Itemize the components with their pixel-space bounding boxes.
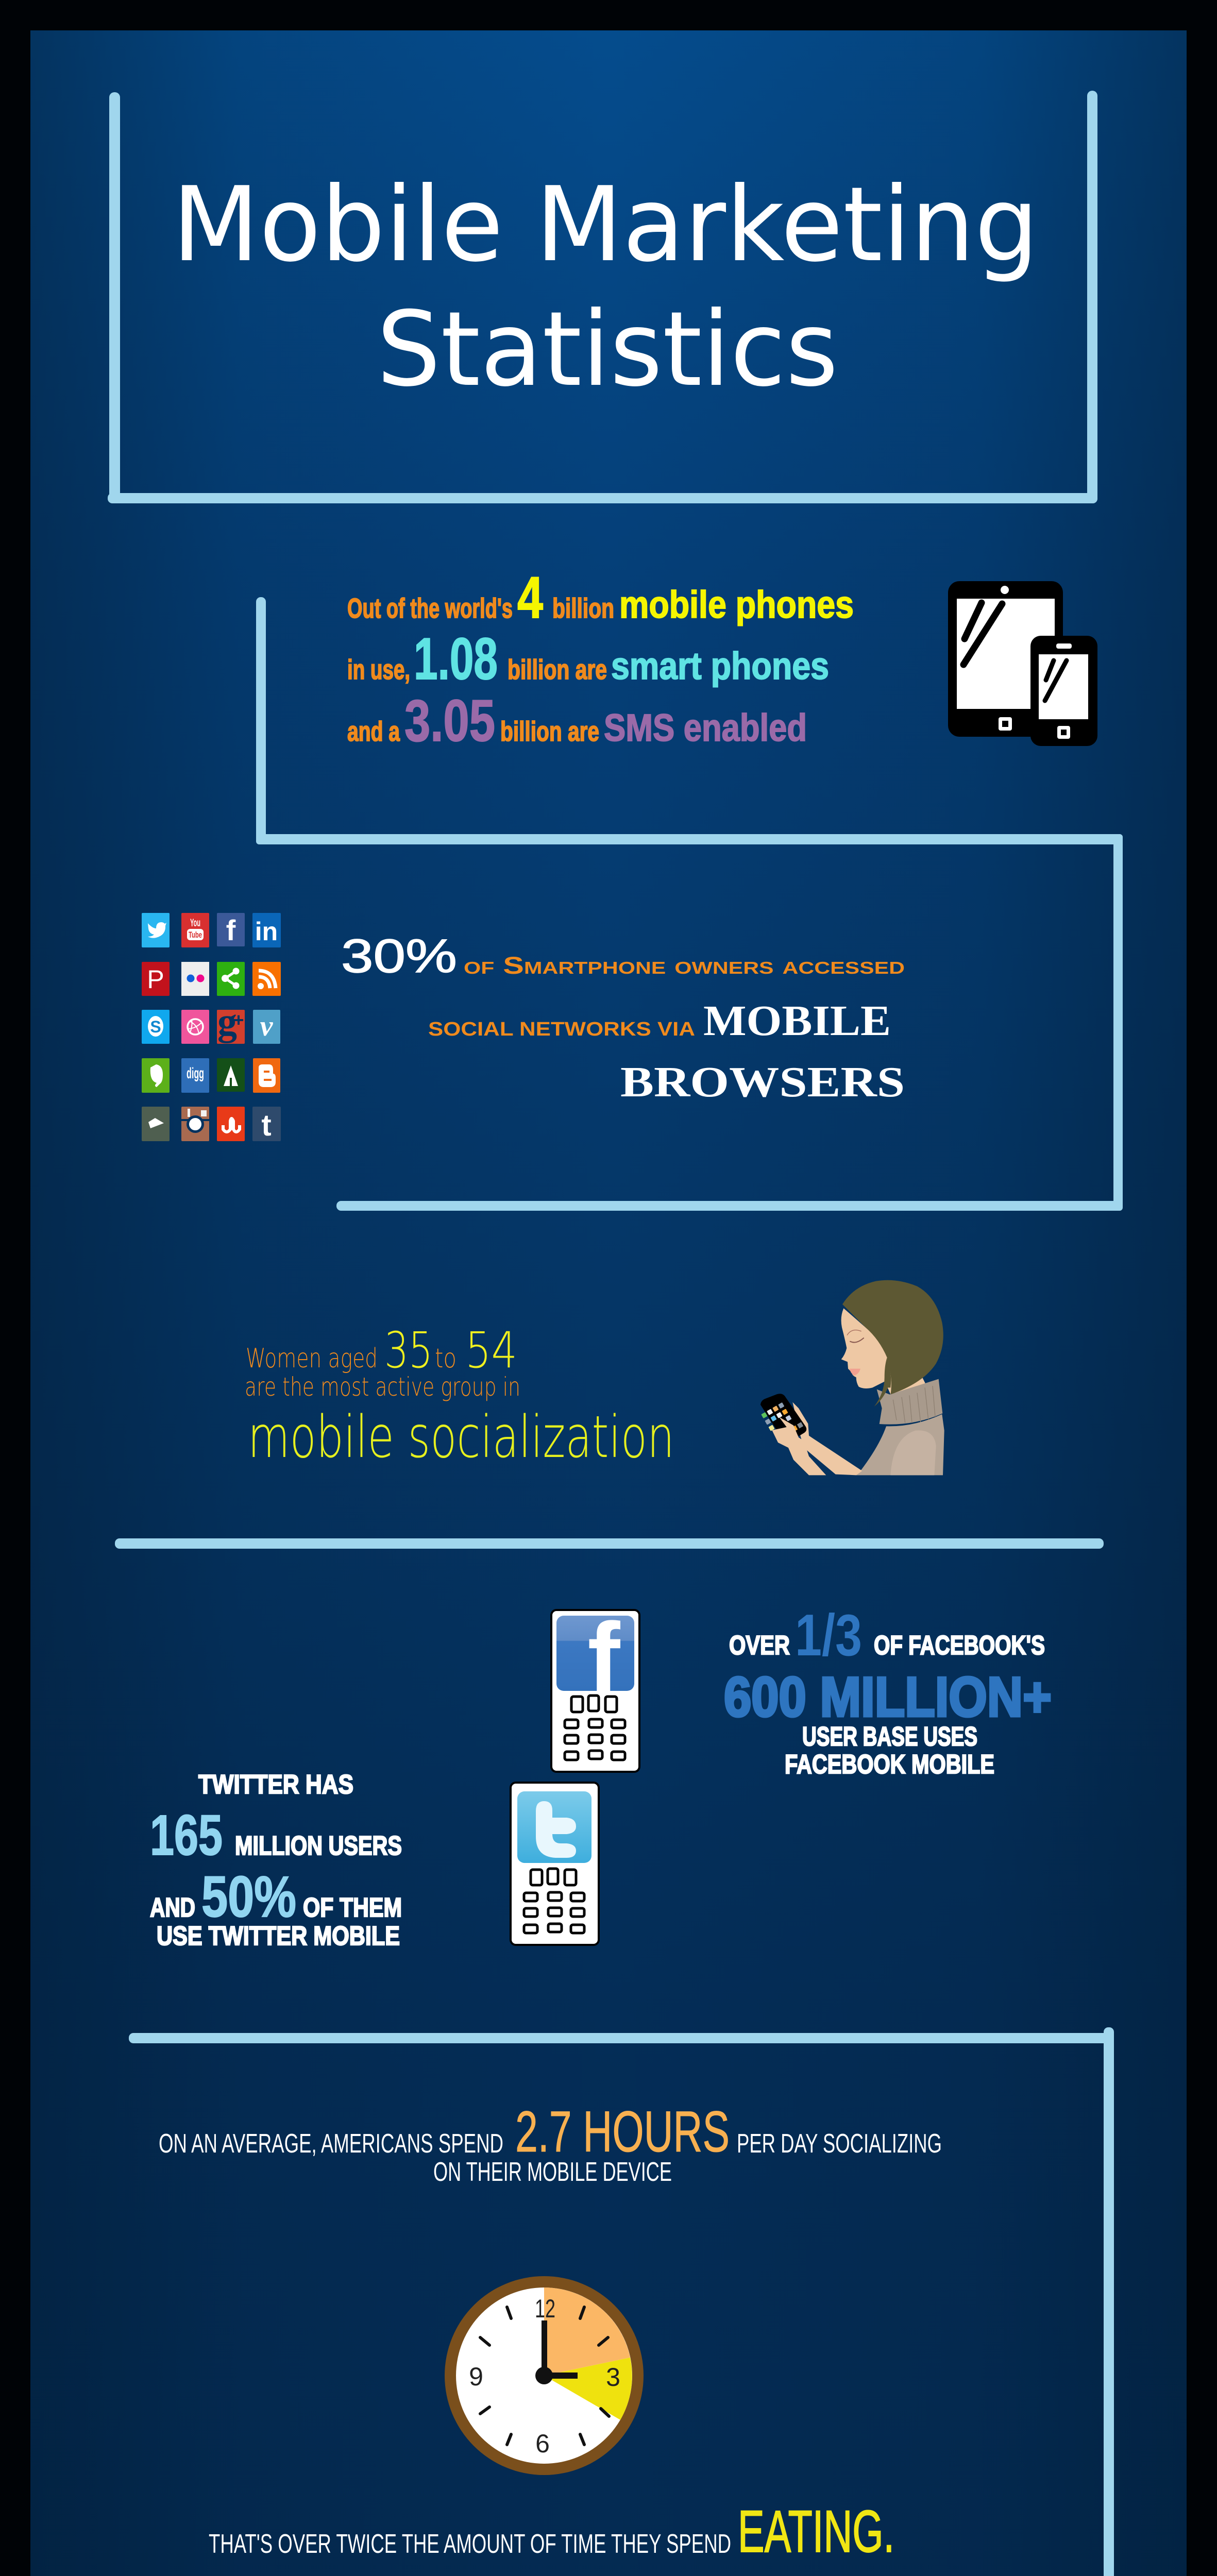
icons: social network grid (142, 913, 281, 1142)
stat: smartphone owners: MOBILE (703, 997, 891, 1045)
stat: women aged 35 to 54 (245, 1321, 674, 1471)
stat: world's mobile phones: 3.05 (404, 688, 495, 754)
stat: facebook mobile: 600 MILLION+ (724, 1666, 1052, 1728)
icon: skype: S (150, 1018, 161, 1036)
icon: tumblr (252, 1107, 281, 1142)
title: Statistics (377, 290, 838, 410)
stat: women aged 35 to 54: 54 (465, 1321, 517, 1379)
stat: hours per day: ON AN AVERAGE, AMERICANS SPEND (159, 2129, 503, 2159)
clock: 6 (535, 2429, 550, 2458)
icon: vimeo: v (260, 1010, 274, 1042)
icon: deviantart (142, 1107, 170, 1141)
stat: twice the time eating (209, 2499, 894, 2565)
stat: world's mobile phones: Out of the world's (347, 593, 513, 624)
icon: skype (142, 1010, 170, 1044)
stat: facebook mobile: 1/3 (795, 1603, 862, 1668)
stat: world's mobile phones: in use, (347, 654, 410, 685)
icon: dribbble (181, 1010, 209, 1044)
stat: women aged 35 to 54: 35 (384, 1321, 433, 1379)
icon: facebook (217, 913, 245, 946)
stat: women aged 35 to 54: Women aged (246, 1343, 378, 1374)
stat: world's mobile phones: billion are (500, 716, 599, 747)
icon: vimeo (253, 1010, 280, 1044)
icon: youtube: Tube (189, 930, 202, 940)
stat: world's mobile phones: 4 (517, 565, 543, 631)
icon: rss (252, 962, 281, 996)
stat: twice the time eating: EATING. (738, 2499, 894, 2565)
stat: hours per day (159, 2099, 942, 2187)
stat: women aged 35 to 54: are the most active group in (245, 1372, 520, 1402)
stat: facebook mobile: FACEBOOK MOBILE (785, 1750, 994, 1780)
clock: 3 (606, 2363, 620, 2392)
icon: phone with facebook (551, 1603, 639, 1772)
stat: smartphone owners: of Smartphone owners accessed (464, 952, 905, 979)
icon: digg: digg (187, 1065, 204, 1082)
stat: women aged 35 to 54: mobile socialization (248, 1404, 674, 1471)
stat: world's mobile phones: 1.08 (414, 626, 498, 692)
stat: world's mobile phones: mobile phones (619, 583, 854, 626)
stat: hours per day: 2.7 HOURS (515, 2099, 730, 2164)
stat: smartphone owners: BROWSERS (620, 1058, 905, 1106)
icon: google plus: + (233, 1009, 244, 1030)
icon: forrst (217, 1058, 245, 1092)
stat: facebook mobile (724, 1603, 1052, 1780)
icon: linkedin: in (255, 917, 278, 946)
title frame (108, 91, 1097, 503)
stat: women aged 35 to 54: to (435, 1343, 457, 1374)
stat: world's mobile phones (347, 565, 854, 754)
stat: world's mobile phones: SMS enabled (604, 706, 807, 749)
icon: tablet and phone (948, 581, 1097, 746)
stat: facebook mobile: USER BASE USES (802, 1722, 977, 1752)
stat: smartphone owners: 30% (341, 930, 457, 982)
icon: instagram (181, 1107, 209, 1141)
stat: smartphone owners (341, 930, 905, 1106)
icon: blogger (253, 1058, 280, 1093)
icon: pinterest (142, 962, 170, 996)
icon: digg (181, 1058, 209, 1093)
icon: google plus (217, 1000, 245, 1044)
stat: twitter mobile: USE TWITTER MOBILE (157, 1921, 400, 1951)
icon: twitter (142, 913, 170, 947)
stat: twitter mobile: TWITTER HAS (198, 1770, 353, 1800)
title (172, 165, 1039, 410)
divider: section break (115, 1538, 1104, 1549)
stat: twitter mobile: 165 (150, 1804, 223, 1867)
icon: phone with twitter (511, 1783, 599, 1945)
stat: hours per day: PER DAY SOCIALIZING (737, 2129, 942, 2159)
stat: twitter mobile: MILLION USERS (235, 1831, 402, 1861)
stat: world's mobile phones: and a (347, 716, 400, 747)
stat: facebook mobile: OVER (729, 1631, 790, 1660)
stat: twitter mobile: OF THEM (303, 1893, 402, 1923)
icon: google plus: g (217, 1000, 237, 1043)
icon: youtube: You (190, 917, 200, 929)
stat: twice the time eating: THAT'S OVER TWICE THE AMOUNT OF TIME THEY SPEND (209, 2529, 731, 2559)
icon: phone with facebook: f (587, 1603, 620, 1712)
clock (445, 2276, 644, 2475)
stat: world's mobile phones: billion are (508, 654, 607, 685)
stat: smartphone owners: SOCIAL NETWORKS VIA (428, 1019, 695, 1040)
connector frame: phones to social (256, 597, 1123, 1211)
icon: youtube (181, 913, 209, 947)
connector frame: hours section (129, 2027, 1114, 2576)
clock: 9 (469, 2362, 483, 2391)
stat: facebook mobile: OF FACEBOOK'S (874, 1631, 1045, 1660)
stat: twitter mobile (150, 1770, 402, 1951)
icon: flickr (181, 962, 209, 996)
icon: evernote (142, 1058, 170, 1093)
stat: world's mobile phones: smart phones (611, 645, 829, 687)
title: Mobile Marketing (172, 165, 1039, 285)
icon: share (217, 962, 245, 996)
icon: facebook: f (226, 914, 236, 946)
stat: twitter mobile: 50% (201, 1865, 296, 1929)
illustration: woman with phone (760, 1280, 944, 1475)
stat: world's mobile phones: billion (552, 593, 614, 624)
clock: 12 (535, 2294, 555, 2323)
icon: linkedin (252, 913, 281, 947)
icon: pinterest: P (147, 965, 164, 994)
icon: tumblr: t (261, 1109, 272, 1142)
icon: stumbleupon (217, 1107, 245, 1141)
stat: hours per day: ON THEIR MOBILE DEVICE (433, 2157, 672, 2187)
stat: twitter mobile: AND (150, 1893, 195, 1923)
